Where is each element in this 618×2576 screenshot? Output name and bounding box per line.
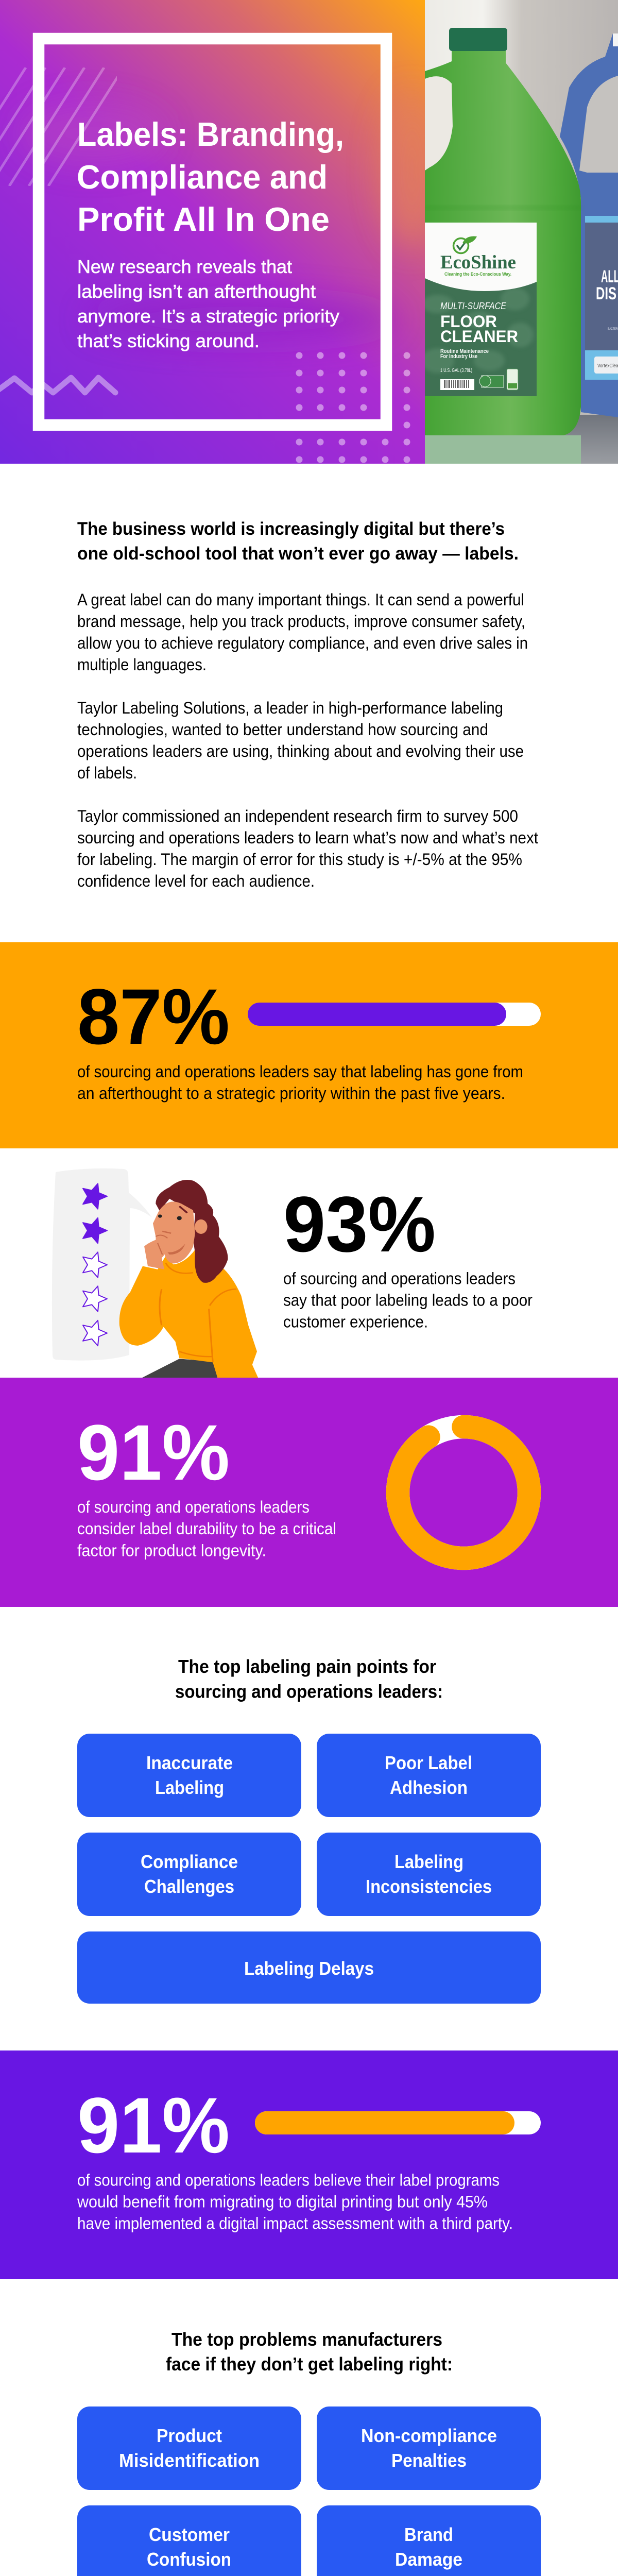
stat number 87%: 87% xyxy=(77,973,230,1061)
box: Inaccurate Labeling: Inaccurate xyxy=(146,1752,233,1773)
subtitle: anymore. It’s a strategic priority xyxy=(77,306,339,327)
label text: FLOOR xyxy=(440,312,497,331)
box: Product Misidentification: Product xyxy=(157,2425,222,2446)
box: Non-compliance Penalties xyxy=(317,2406,541,2490)
label text: MULTI-SURFACE xyxy=(440,301,507,311)
panel: 91% label durability xyxy=(0,1378,618,1607)
hero soft blurred photo shapes xyxy=(31,107,425,339)
heading: The top problems manufacturers xyxy=(171,2329,442,2350)
label text xyxy=(440,252,518,374)
title: Profit All In One xyxy=(77,200,330,238)
stat text xyxy=(77,1062,523,1103)
box: Product Misidentification: Misidentification xyxy=(119,2450,260,2471)
panel: top labeling pain points xyxy=(77,1656,541,2004)
heading: sourcing and operations leaders: xyxy=(175,1681,443,1702)
intro paragraph 2 xyxy=(77,699,524,782)
subtitle: New research reveals that xyxy=(77,256,292,277)
subtitle xyxy=(77,256,339,351)
intro paragraph 2: of labels. xyxy=(77,764,137,782)
intro paragraph 1: brand message, help you track products, improve consumer safety, xyxy=(77,612,525,631)
orange band xyxy=(0,942,618,1148)
intro paragraph 1 xyxy=(77,590,528,674)
stat text: have implemented a digital impact assessment with a third party. xyxy=(77,2214,513,2233)
box: Labeling Inconsistencies xyxy=(317,1833,541,1916)
label text: Routine Maintenance xyxy=(440,348,489,354)
box: Compliance Challenges xyxy=(77,1833,301,1916)
stat text xyxy=(77,2171,513,2233)
heading: The top labeling pain points for xyxy=(178,1656,436,1677)
intro lead text: The business world is increasingly digital but there’s xyxy=(77,519,505,539)
stat text xyxy=(77,1498,336,1560)
purple band xyxy=(0,1378,618,1607)
intro paragraph 1: multiple languages. xyxy=(77,655,207,674)
stat number 91%: 91% xyxy=(77,1409,230,1497)
woman figure xyxy=(119,1180,258,1378)
icon: check and leaf logo xyxy=(453,236,477,253)
heading: face if they don’t get labeling right: xyxy=(166,2353,453,2375)
speech bubble with stars xyxy=(52,1168,152,1361)
box: Compliance Challenges: Challenges xyxy=(144,1876,234,1897)
box: Customer Confusion: Customer xyxy=(149,2524,230,2545)
title xyxy=(77,115,344,238)
dot grid decoration xyxy=(296,352,410,463)
stat text: would benefit from migrating to digital printing but only 45% xyxy=(77,2193,488,2211)
stat text: of sourcing and operations leaders believe their label programs xyxy=(77,2171,500,2190)
intro paragraph 3: for labeling. The margin of error for this study is +/-5% at the 95% xyxy=(77,850,522,869)
label text: For Industry Use xyxy=(440,353,477,360)
label text: CLEANER xyxy=(440,327,518,346)
box: Labeling Delays: Labeling Delays xyxy=(244,1958,374,1979)
stat text: customer experience. xyxy=(283,1313,428,1331)
box: Non-compliance Penalties: Penalties xyxy=(391,2450,467,2471)
illustration: woman thinking with star rating xyxy=(52,1168,258,1378)
box: Labeling Delays xyxy=(77,1931,541,2004)
zigzag decoration xyxy=(0,378,115,393)
heading xyxy=(175,1656,443,1702)
title: Labels: Branding, xyxy=(77,115,344,153)
intro lead text xyxy=(77,519,519,564)
stat number 91%: 91% xyxy=(77,2081,230,2170)
stat text: of sourcing and operations leaders xyxy=(77,1498,310,1516)
intro paragraph 2: Taylor Labeling Solutions, a leader in high-performance labeling xyxy=(77,699,503,717)
panel: introduction xyxy=(77,519,538,890)
intro paragraph 1: allow you to achieve regulatory compliance, and even drive sales in xyxy=(77,634,528,652)
title: Compliance and xyxy=(77,158,328,196)
box: Customer Confusion: Confusion xyxy=(147,2549,231,2570)
box: Brand Damage xyxy=(317,2505,541,2576)
label text: EcoShine xyxy=(440,252,516,273)
photo background xyxy=(425,0,618,464)
intro paragraph 3 xyxy=(77,807,538,890)
intro paragraph 2: operations leaders are using, thinking about and evolving their use xyxy=(77,742,524,760)
donut chart 91% xyxy=(398,1427,529,1558)
violet band xyxy=(0,2050,618,2279)
box: Inaccurate Labeling: Labeling xyxy=(155,1777,224,1798)
label text: Cleaning the Eco-Conscious Way. xyxy=(444,272,511,277)
panel: 91% digital printing xyxy=(0,2050,618,2279)
box: Poor Label Adhesion: Poor Label xyxy=(385,1752,472,1773)
stat text: an afterthought to a strategic priority within the past five years. xyxy=(77,1084,505,1103)
progress bar 91% xyxy=(255,2111,541,2134)
white title frame xyxy=(39,39,386,425)
box: Poor Label Adhesion: Adhesion xyxy=(390,1777,468,1798)
box: Customer Confusion xyxy=(77,2505,301,2576)
stat text: say that poor labeling leads to a poor xyxy=(283,1291,533,1310)
diagonal stripes decoration xyxy=(0,67,117,186)
intro paragraph 3: confidence level for each audience. xyxy=(77,872,315,890)
green bottle xyxy=(425,28,581,464)
photo floor xyxy=(425,415,618,464)
box: Brand Damage: Damage xyxy=(395,2549,462,2570)
heading xyxy=(166,2329,453,2375)
intro paragraph 3: sourcing and operations leaders to learn what’s now and what’s next xyxy=(77,828,538,847)
stat text: of sourcing and operations leaders say that labeling has gone from xyxy=(77,1062,523,1081)
box: Non-compliance Penalties: Non-compliance xyxy=(361,2425,497,2446)
intro paragraph 1: A great label can do many important things. It can send a powerful xyxy=(77,590,524,609)
hero gradient background xyxy=(0,0,425,464)
stat text xyxy=(283,1269,533,1331)
stat text: consider label durability to be a critical xyxy=(77,1519,336,1538)
panel: 93% customer experience xyxy=(52,1168,533,1378)
box: Poor Label Adhesion xyxy=(317,1734,541,1817)
box: Labeling Inconsistencies: Inconsistencies xyxy=(366,1876,492,1897)
stat number 93%: 93% xyxy=(283,1180,436,1268)
stat text: factor for product longevity. xyxy=(77,1541,266,1560)
panel: 87% statistic xyxy=(0,942,618,1148)
intro lead text: one old-school tool that won’t ever go away — labels. xyxy=(77,544,519,564)
panel: top problems manufacturers face xyxy=(77,2329,541,2576)
box: Labeling Inconsistencies: Labeling xyxy=(394,1851,464,1872)
subtitle: that’s sticking around. xyxy=(77,330,260,351)
intro paragraph 3: Taylor commissioned an independent research firm to survey 500 xyxy=(77,807,518,825)
intro paragraph 2: technologies, wanted to better understand how sourcing and xyxy=(77,720,488,739)
photo: cleaning product bottles xyxy=(421,0,618,464)
barcode xyxy=(440,379,474,390)
blue bottle xyxy=(560,33,618,417)
box: Inaccurate Labeling xyxy=(77,1734,301,1817)
stat text: of sourcing and operations leaders xyxy=(283,1269,516,1288)
product label xyxy=(421,223,537,396)
box: Brand Damage: Brand xyxy=(404,2524,453,2545)
panel: hero banner xyxy=(0,0,443,464)
certification badges xyxy=(479,369,518,390)
box: Compliance Challenges: Compliance xyxy=(141,1851,238,1872)
progress bar 87% xyxy=(248,1003,541,1026)
subtitle: labeling isn’t an afterthought xyxy=(77,281,316,302)
box: Product Misidentification xyxy=(77,2406,301,2490)
label text: 1 U.S. GAL (3.78L) xyxy=(440,368,472,374)
